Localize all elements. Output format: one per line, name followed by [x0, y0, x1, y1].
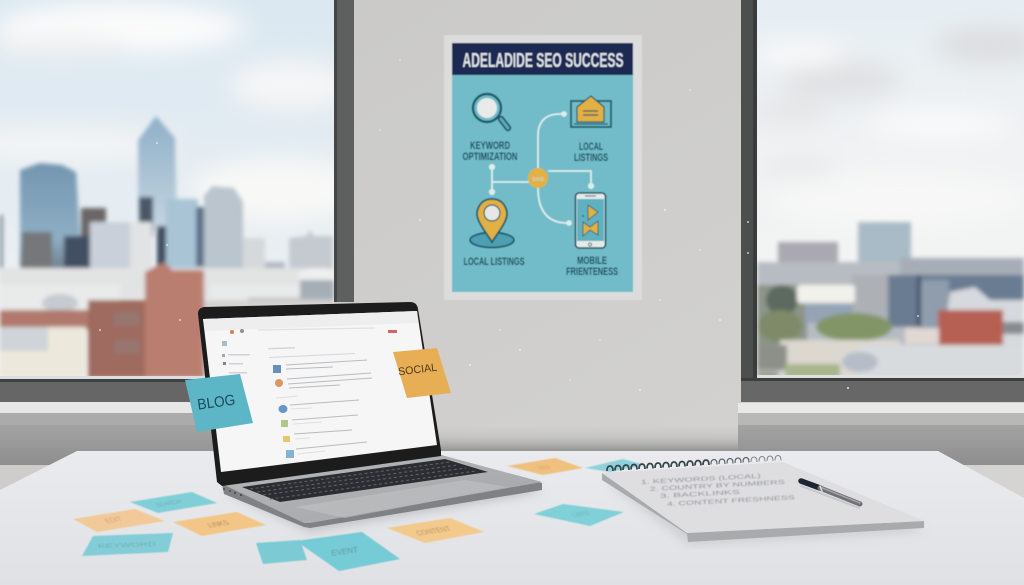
pen: [801, 481, 860, 508]
keyword label: OPTIMIZATION: [462, 151, 518, 163]
notebook notes: [641, 474, 795, 508]
sticky: blue top left: SEARCH: [154, 499, 184, 509]
sticky: blue behind notebook: [585, 459, 645, 472]
poster frame: [444, 35, 642, 300]
sticky: blue right: LISTS: [571, 510, 591, 519]
notebook notes: 2. COUNTRY BY NUMBERS: [650, 480, 785, 493]
laptop keyboard: [242, 459, 488, 502]
icon: map pin: [470, 199, 514, 248]
sidebar: [222, 341, 250, 374]
poster title: [452, 43, 633, 75]
sticky note: social: [393, 348, 451, 398]
table: [0, 451, 1024, 585]
laptop: [198, 302, 545, 532]
icon: magnifying glass: [473, 94, 508, 128]
poster: [444, 35, 642, 300]
sticky: blue front: EVENT: [331, 545, 359, 558]
poster teal panel: [452, 43, 633, 292]
sticky: blue behind: [256, 540, 307, 564]
right window view: [750, 0, 1024, 378]
mobile friendliness label: FRIENTENESS: [566, 266, 618, 278]
sticky: blue front: [296, 532, 400, 571]
icon: smartphone: [576, 193, 606, 248]
wall specks: [99, 59, 919, 391]
notebook pad: [602, 462, 924, 542]
left window view: [0, 0, 334, 376]
mobile friendliness label: MOBILE: [577, 255, 607, 267]
sticky: orange content: CONTENT: [414, 524, 453, 537]
connector lines: [490, 112, 593, 225]
scattered sticky notes: [73, 458, 645, 571]
sticky: orange content: [387, 518, 484, 543]
sticky: orange links: LINKS: [205, 519, 231, 529]
sticky: orange edit: [73, 509, 165, 532]
local listings label left: LOCAL LISTINGS: [464, 256, 524, 268]
wall shadow above table: [200, 425, 740, 452]
local listings label right: [574, 141, 608, 164]
notebook notes: 4. CONTENT FRESHNESS: [667, 495, 795, 508]
poster title: ADELADIDE SEO SUCCESS: [462, 50, 624, 72]
results list: [268, 347, 372, 458]
sticky: orange behind laptop: SEO: [537, 465, 552, 471]
local listings label right: LISTINGS: [574, 152, 608, 164]
mobile friendliness label: [566, 255, 618, 278]
laptop lid: [198, 302, 441, 486]
sticky: orange edit: EDIT: [102, 515, 125, 525]
laptop screen: [203, 311, 437, 472]
window frame: right lower rail: [741, 375, 1024, 402]
window frame: left mullion: [334, 0, 354, 302]
sticky: orange behind laptop: [507, 458, 583, 475]
keyword label: KEYWORD: [470, 140, 510, 152]
sticky: orange links: [173, 512, 266, 536]
icon: listing envelope: [571, 96, 611, 127]
center node: [528, 168, 548, 188]
window sill: right: [738, 403, 1024, 465]
laptop shadow: [225, 478, 545, 532]
window frame: right mullion: [741, 0, 757, 380]
local listings label right: LOCAL: [579, 141, 603, 153]
sticky note: blog: BLOG: [196, 391, 236, 414]
browser toolbar: [203, 311, 418, 334]
sticky note: blog: [185, 374, 253, 432]
sticky: blue top left: [130, 492, 217, 513]
window frame: left lower rail: [0, 376, 220, 402]
keyword label: [462, 140, 518, 163]
notebook notes: 1. KEYWORDS (LOCAL): [641, 474, 761, 486]
laptop ports: [223, 488, 242, 496]
sticky note: social: SOCIAL: [398, 362, 438, 378]
center node: seo: [532, 176, 544, 183]
sticky: blue right: [534, 504, 624, 526]
window sill: left: [0, 402, 220, 465]
sticky: blue wide: KEYWORD: [98, 542, 157, 550]
notebook spiral: [607, 456, 781, 471]
sticky: blue wide: [82, 533, 173, 556]
notebook: [602, 456, 926, 545]
notebook shadow: [605, 482, 926, 545]
laptop base: [222, 455, 542, 528]
notebook notes: 3. BACKLINKS: [660, 490, 740, 500]
